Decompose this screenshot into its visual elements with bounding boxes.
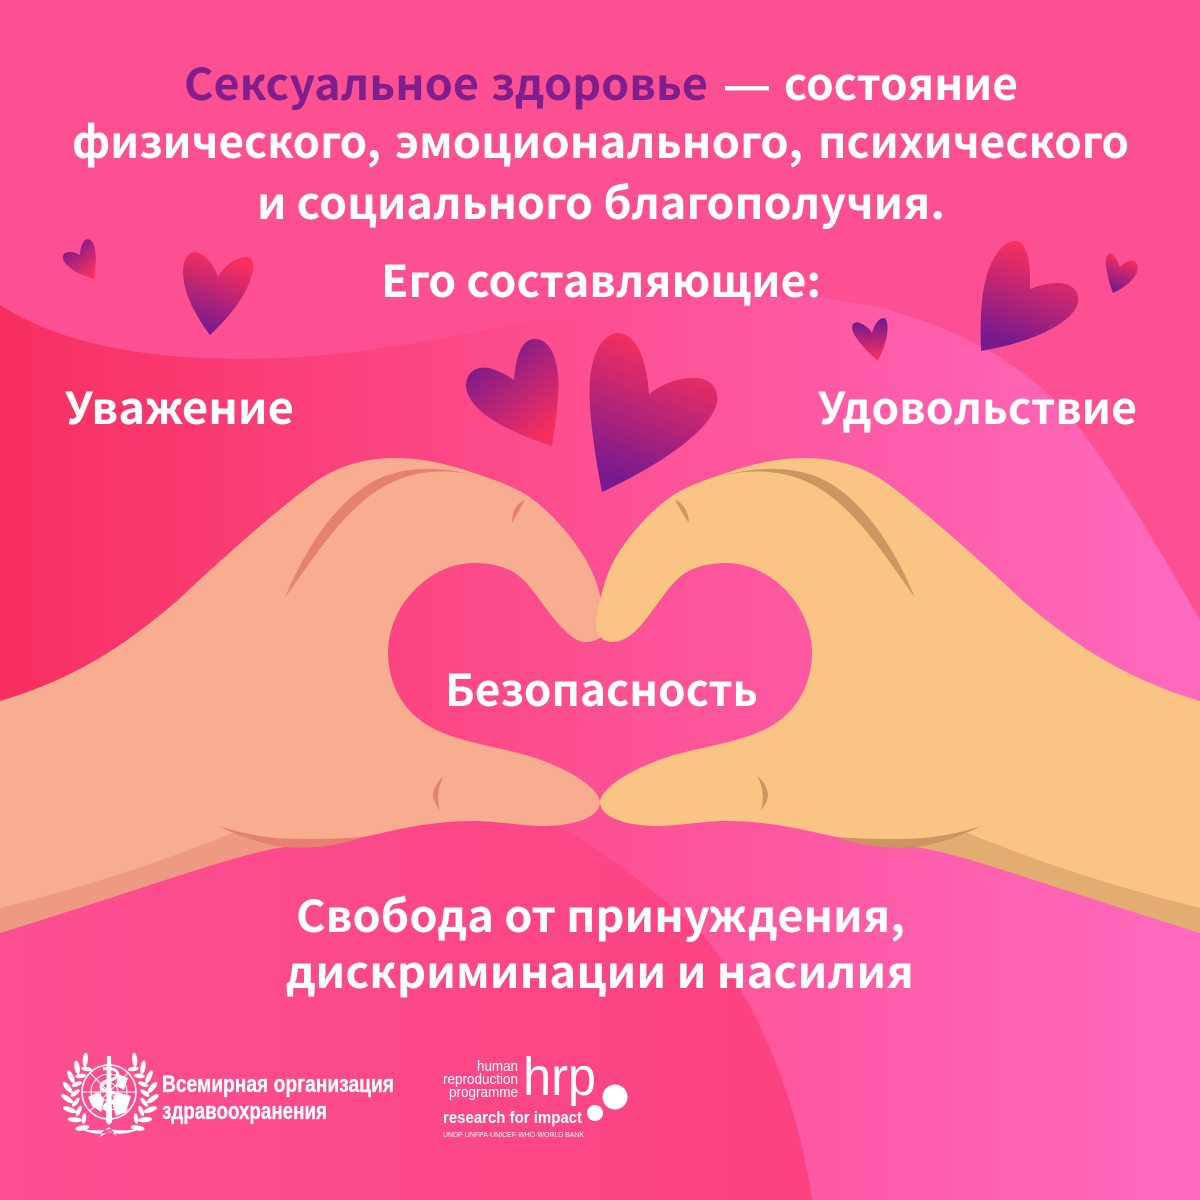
label: respect: Уважение: [65, 373, 294, 437]
HRP tagline: research for impact: [443, 1108, 582, 1127]
title: здоровье: [491, 49, 708, 113]
subheading: Его составляющие:: [381, 246, 821, 310]
logo: WHO: [60, 1053, 394, 1137]
logo: HRP: [443, 1047, 628, 1139]
left hand: [0, 458, 603, 933]
title: состояние: [784, 49, 1018, 113]
crease: fingertip: [675, 500, 689, 523]
title: и социального благополучия.: [257, 168, 945, 232]
HRP partners: UNDP·UNFPA·UNICEF·WHO·WORLD BANK: [443, 1130, 584, 1139]
heart: center right: [590, 333, 717, 492]
heart: top left large: [183, 252, 253, 335]
wrist shadow: [0, 828, 364, 933]
HRP small text: programme: [449, 1084, 518, 1101]
label: pleasure: Удовольствие: [818, 373, 1137, 437]
WHO emblem: [60, 1053, 160, 1137]
crease: knuckle: [285, 469, 478, 598]
title: психического: [818, 107, 1129, 171]
label: safety: Безопасность: [445, 655, 758, 719]
crease: fingertip: [512, 500, 525, 523]
crease: thumb: [433, 776, 444, 810]
WHO name: здравоохранения: [162, 1098, 327, 1125]
right hand: [596, 458, 1200, 933]
title: физического,: [72, 107, 381, 171]
heart: middle right small: [852, 318, 888, 361]
title: Сексуальное: [184, 49, 479, 113]
label: freedom: дискриминации и насилия: [286, 937, 914, 1001]
palm and fingers: [596, 458, 1200, 908]
HRP small text: reproduction: [443, 1071, 518, 1088]
label: freedom: [286, 881, 914, 1001]
wrist shadow: [836, 828, 1200, 933]
crease: wrist: [836, 826, 981, 848]
HRP letters: hrp: [523, 1047, 596, 1107]
HRP small text: human: [477, 1058, 518, 1075]
title: [72, 49, 1129, 232]
label: freedom: Свобода от принуждения,: [296, 881, 905, 945]
crease: knuckle: [722, 469, 915, 598]
HRP small text: [443, 1058, 518, 1101]
palm and fingers: [0, 458, 603, 908]
heart: top right small: [1106, 253, 1138, 293]
title: эмоционального,: [395, 107, 803, 171]
heart: top left small: [63, 239, 96, 279]
crease: thumb: [757, 776, 768, 810]
title: —: [725, 61, 769, 110]
heart: top right large: [981, 241, 1078, 351]
WHO name: [162, 1071, 394, 1125]
WHO name: Всемирная организация: [162, 1071, 394, 1098]
HRP dots: [587, 1084, 628, 1121]
crease: wrist: [219, 826, 364, 848]
heart: center left: [466, 339, 559, 446]
